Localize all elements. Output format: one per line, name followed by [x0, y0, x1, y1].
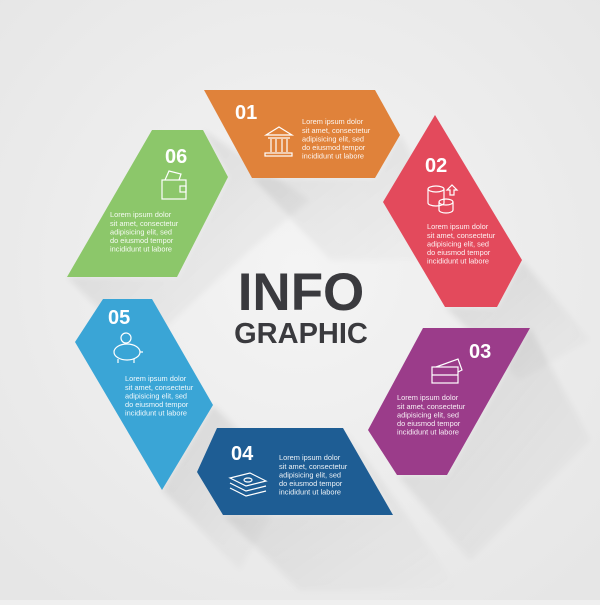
panel 01: Lorem ipsum dolor: [302, 117, 364, 126]
panel 06: incididunt ut labore: [110, 244, 172, 254]
panel 05: adipisicing elit, sed: [125, 392, 187, 400]
panel 06: 06: [165, 146, 187, 168]
panel 06: [67, 130, 228, 277]
panel 04: 04: [231, 443, 254, 465]
title: [234, 263, 368, 350]
panel 05: Lorem ipsum dolor: [125, 374, 187, 383]
icon: money stack: [230, 473, 266, 496]
panel 01: incididunt ut labore: [302, 152, 364, 160]
panel 01: [204, 90, 400, 178]
panel 02: Lorem ipsum dolor: [427, 222, 489, 231]
panel 05: sit amet, consectetur: [125, 383, 194, 392]
panel 02: [383, 115, 522, 307]
panel 02: adipisicing elit, sed: [427, 240, 489, 248]
panel 06: Lorem ipsum dolor: [110, 210, 172, 219]
panel 04: [197, 428, 393, 515]
panel 05: do eiusmod tempor: [125, 400, 189, 409]
panel 04: sit amet, consectetur: [279, 462, 348, 471]
title: GRAPHIC: [234, 318, 368, 350]
title: INFO: [238, 263, 364, 322]
panel 03: incididunt ut labore: [397, 428, 459, 436]
panel 03: sit amet, consectetur: [397, 402, 466, 411]
panel 06: sit amet, consectetur: [110, 219, 179, 228]
icon: bank: [265, 127, 292, 156]
panel 06: do eiusmod tempor: [110, 236, 174, 245]
icon: coins: [428, 185, 457, 213]
shadows: [67, 90, 590, 590]
panel 01: sit amet, consectetur: [302, 126, 371, 135]
panel 01: adipisicing elit, sed: [302, 134, 364, 144]
panel 03: adipisicing elit, sed: [397, 410, 459, 420]
panel 02: incididunt ut labore: [427, 256, 489, 266]
panel 04: do eiusmod tempor: [279, 479, 343, 488]
panel 02: 02: [425, 155, 447, 177]
panel 01: do eiusmod tempor: [302, 143, 366, 152]
panel 02: do eiusmod tempor: [427, 248, 491, 257]
panel 05: 05: [108, 307, 130, 329]
panel 04: Lorem ipsum dolor: [279, 453, 341, 462]
panel 05: [75, 299, 213, 490]
panel 03: 03: [469, 341, 491, 363]
panel 04: adipisicing elit, sed: [279, 470, 341, 480]
panel 01: 01: [235, 102, 257, 124]
icon: credit cards: [432, 359, 462, 383]
icon: piggy bank: [114, 333, 143, 363]
panel 04: incididunt ut labore: [279, 488, 341, 496]
icon: wallet: [162, 171, 186, 199]
panel 06: adipisicing elit, sed: [110, 228, 172, 236]
panel 02: sit amet, consectetur: [427, 231, 496, 240]
panel 05: incididunt ut labore: [125, 408, 187, 418]
panel 03: [368, 328, 530, 475]
panel 03: do eiusmod tempor: [397, 419, 461, 428]
panel 03: Lorem ipsum dolor: [397, 393, 459, 402]
